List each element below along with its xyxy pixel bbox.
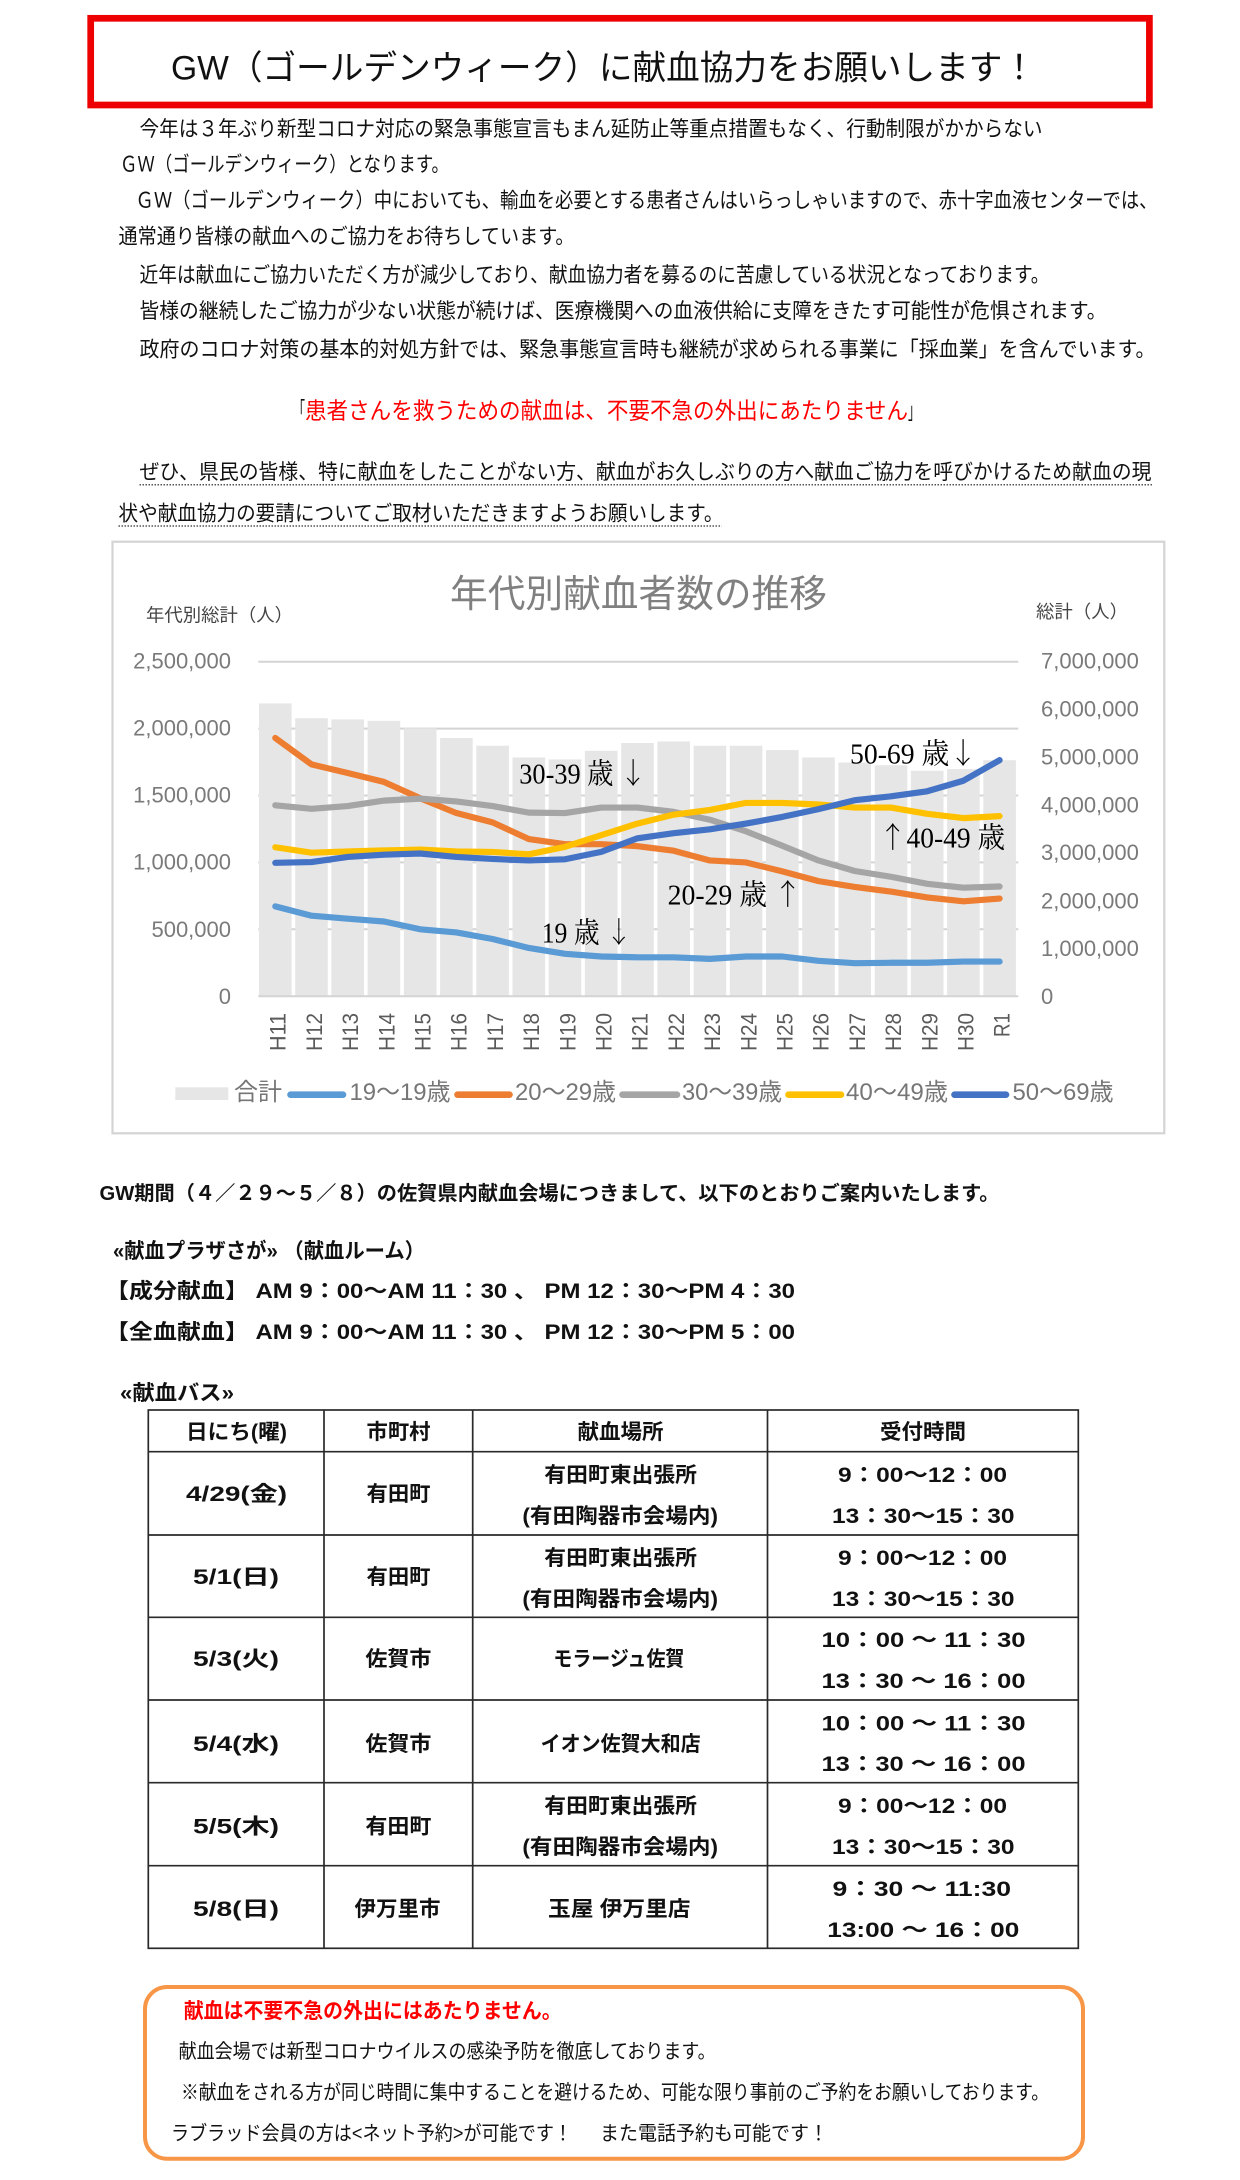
notice heading: 献血は不要不急の外出にはあたりません。 (184, 2000, 562, 2023)
row: 5/4: 5/4(水) (193, 1733, 279, 1756)
table header (186, 1421, 966, 1444)
row: 5/1: 5/1(日) (193, 1566, 279, 1589)
left axis values: 1,000,000 (133, 850, 231, 875)
row: 5/5: 5/5(木) (193, 1816, 279, 1838)
category axis labels: H15 (410, 1013, 436, 1051)
category axis labels: H30 (954, 1013, 978, 1051)
annotation: 40-49: ↑40-49 歳 (879, 815, 1005, 856)
text block: introduction: 政府のコロナ対策の基本的対処方針では、緊急事態宣言時も継続が求められる事業に「採血業」を含んでいます。 (140, 338, 1156, 361)
row: 5/1: 有田町東出張所 (544, 1547, 697, 1570)
annotation: 19: 19 歳 ↓ (542, 910, 632, 952)
category axis labels: H21 (628, 1013, 653, 1051)
callout: red message: 」 (908, 398, 920, 424)
text block: introduction: 今年は３年ぶり新型コロナ対応の緊急事態宣言もまん延防止等重点措置もなく、行動制限がかからない (140, 118, 1042, 141)
text block: donation plaza hours: 【全血献血】 AM 9：00～AM 11：30 、 PM 12：30～PM 5：00 (105, 1321, 795, 1344)
category axis labels: H14 (374, 1013, 399, 1051)
text block: introduction: ＧＷ（ゴールデンウィーク）となります。 (120, 153, 449, 176)
text block: introduction (118, 118, 1158, 361)
notice text: ラブラッド会員の方は<ネット予約>が可能です！ (171, 2121, 572, 2145)
row: 5/5: 9：00～12：00 (838, 1795, 1007, 1818)
row: 5/5: (有田陶器市会場内) (522, 1836, 718, 1859)
legend: 50～69歳 (1012, 1079, 1114, 1106)
table header: 日にち(曜) (186, 1421, 287, 1444)
row: 5/1: (有田陶器市会場内) (522, 1588, 718, 1611)
legend (175, 1079, 1114, 1106)
row: 5/8: 伊万里市 (354, 1898, 440, 1921)
annotation: 50-69: 50-69 歳↓ (850, 731, 977, 772)
callout: red message: 「 (293, 398, 305, 424)
notice text (171, 2040, 1049, 2145)
right axis values: 7,000,000 (1041, 648, 1139, 673)
line: age 30-39 (275, 799, 1000, 888)
category axis labels: H18 (519, 1013, 544, 1051)
notice text: ※献血をされる方が同じ時間に集中することを避けるため、可能な限り事前のご予約をお願いしております。 (181, 2081, 1049, 2104)
right axis values: 5,000,000 (1041, 744, 1139, 769)
table header: 献血場所 (578, 1421, 664, 1444)
right axis values: 2,000,000 (1041, 888, 1139, 913)
row: 5/3 (193, 1629, 1026, 1693)
notice panel (145, 1987, 1083, 2159)
text block: underlined request: ぜひ、県民の皆様、特に献血をしたことがない方、献血がお久しぶりの方へ献血ご協力を呼びかけるため献血の現 (140, 461, 1152, 484)
text block: donation plaza hours (105, 1239, 795, 1344)
category axis labels: H12 (302, 1013, 327, 1051)
left axis title: 年代別総計（人） (146, 606, 293, 626)
legend: 20～29歳 (515, 1079, 616, 1106)
line: age 40-49 (275, 803, 1000, 854)
right axis values: 3,000,000 (1041, 840, 1139, 865)
right axis values: 6,000,000 (1041, 697, 1139, 722)
table header: 市町村 (366, 1421, 430, 1444)
line: age 19 (275, 906, 1000, 963)
row: 4/29 (186, 1464, 1014, 1528)
category axis labels: H25 (772, 1013, 798, 1051)
category axis labels: H19 (555, 1013, 580, 1051)
row: 5/1: 9：00～12：00 (838, 1547, 1007, 1570)
annotation: 20-29: 20-29 歳 ↑ (668, 872, 802, 913)
text block: underlined request: 状や献血協力の要請についてご取材いただきますようお願いします。 (118, 502, 724, 526)
category axis labels: H24 (736, 1013, 761, 1051)
row: 4/29: 9：00～12：00 (838, 1464, 1007, 1487)
text block: introduction: 近年は献血にご協力いただく方が減少しており、献血協力者を募るのに苦慮している状況となっております。 (140, 264, 1050, 287)
category axis labels: H20 (592, 1013, 616, 1051)
row: 4/29: 有田町 (366, 1483, 430, 1506)
category axis labels: H13 (338, 1013, 363, 1051)
right axis values: 1,000,000 (1041, 936, 1139, 961)
right axis values (1041, 648, 1139, 1009)
row: 5/5: 有田町 (365, 1816, 431, 1838)
row: 5/5: 13：30～15：30 (832, 1836, 1014, 1859)
left axis values: 2,000,000 (133, 715, 231, 740)
category axis labels: H28 (881, 1013, 906, 1051)
row: 5/1: 有田町 (366, 1566, 430, 1589)
row: 5/4: 13：30 ～ 16：00 (822, 1753, 1026, 1776)
text block: underlined request (118, 461, 1152, 526)
row: 5/3: 佐賀市 (365, 1648, 431, 1671)
table header: 受付時間 (880, 1421, 966, 1444)
callout: red message: 患者さんを救うための献血は、不要不急の外出にあたりません (305, 398, 908, 424)
heading: blood bus: «献血バス» (120, 1382, 234, 1405)
text block: donation plaza hours: «献血プラザさが» （献血ルーム） (113, 1239, 425, 1263)
row: 5/3: 10：00 ～ 11：30 (822, 1629, 1026, 1652)
text block: donation plaza hours: 【成分献血】 AM 9：00～AM 11：30 、 PM 12：30～PM 4：30 (105, 1279, 795, 1303)
category axis labels: H26 (809, 1013, 834, 1051)
text block: introduction: 皆様の継続したご協力が少ない状態が続けば、医療機関への血液供給に支障をきたす可能性が危惧されます。 (140, 300, 1106, 323)
left axis values (133, 648, 231, 1009)
left axis values: 2,500,000 (133, 648, 231, 673)
legend: 19～19歳 (350, 1079, 450, 1106)
category axis labels (266, 1013, 1015, 1051)
chart panel: donors by age group (112, 542, 1164, 1133)
row: 5/4: 10：00 ～ 11：30 (822, 1712, 1026, 1736)
row: 5/8: 5/8(日) (193, 1898, 279, 1921)
category axis labels: H11 (266, 1013, 291, 1051)
line: age 50-69 (275, 760, 1000, 863)
row: 5/5 (193, 1795, 1014, 1859)
bars: total donors (259, 703, 1016, 996)
right axis title: 総計（人） (1036, 602, 1128, 622)
row: 5/5: 有田町東出張所 (544, 1795, 697, 1818)
row: 5/8: 9：30 ～ 11:30 (832, 1878, 1011, 1901)
category axis labels: H22 (664, 1013, 689, 1051)
row: 5/1 (193, 1547, 1014, 1611)
table: blood bus schedule (148, 1410, 1078, 1948)
row: 4/29: (有田陶器市会場内) (522, 1505, 718, 1528)
title banner (91, 18, 1149, 105)
category axis labels: H27 (845, 1013, 870, 1051)
row: 5/4: 佐賀市 (365, 1733, 431, 1756)
row: 5/8: 玉屋 伊万里店 (548, 1898, 690, 1921)
right axis values: 0 (1041, 984, 1053, 1009)
row: 5/3: 13：30 ～ 16：00 (822, 1670, 1026, 1693)
left axis values: 0 (219, 984, 231, 1009)
text block: introduction: 通常通り皆様の献血へのご協力をお待ちしています。 (118, 226, 574, 248)
category axis labels: R1 (990, 1013, 1015, 1037)
category axis labels: H16 (447, 1013, 472, 1051)
line: age 20-29 (275, 738, 1000, 901)
legend: 合計 (234, 1079, 282, 1106)
row: 4/29: 13：30～15：30 (832, 1505, 1014, 1528)
notice text: 献血会場では新型コロナウイルスの感染予防を徹底しております。 (179, 2040, 716, 2063)
category axis labels: H29 (917, 1013, 942, 1051)
heading: GW period guidance: GW期間（４／２９～５／８）の佐賀県内献血会場につきまして、以下のとおりご案内いたします。 (100, 1181, 1000, 1205)
row: 5/8: 13:00 ～ 16：00 (827, 1919, 1019, 1942)
left axis values: 500,000 (151, 917, 231, 942)
row: 5/1: 13：30～15：30 (832, 1588, 1014, 1611)
notice text: また電話予約も可能です！ (600, 2122, 828, 2145)
row: 4/29: 4/29(金) (186, 1483, 287, 1506)
row: 5/3: 5/3(火) (193, 1648, 279, 1671)
category axis labels: H23 (700, 1013, 725, 1051)
chart title: 年代別献血者数の推移 (450, 574, 827, 616)
row: 4/29: 有田町東出張所 (544, 1464, 697, 1487)
legend: 40～49歳 (846, 1079, 948, 1106)
annotation: 30-39: 30-39 歳 ↓ (519, 751, 646, 792)
left axis values: 1,500,000 (133, 783, 231, 808)
row: 5/4: イオン佐賀大和店 (541, 1733, 701, 1756)
row: 5/8 (193, 1878, 1019, 1942)
category axis labels: H17 (483, 1013, 508, 1051)
right axis values: 4,000,000 (1041, 792, 1139, 817)
legend: 30～39歳 (682, 1079, 782, 1106)
trend lines by age group (275, 738, 1000, 963)
row: 5/4 (193, 1712, 1026, 1776)
title banner: GW（ゴールデンウィーク）に献血協力をお願いします！ (171, 50, 1036, 88)
row: 5/3: モラージュ佐賀 (553, 1648, 684, 1671)
